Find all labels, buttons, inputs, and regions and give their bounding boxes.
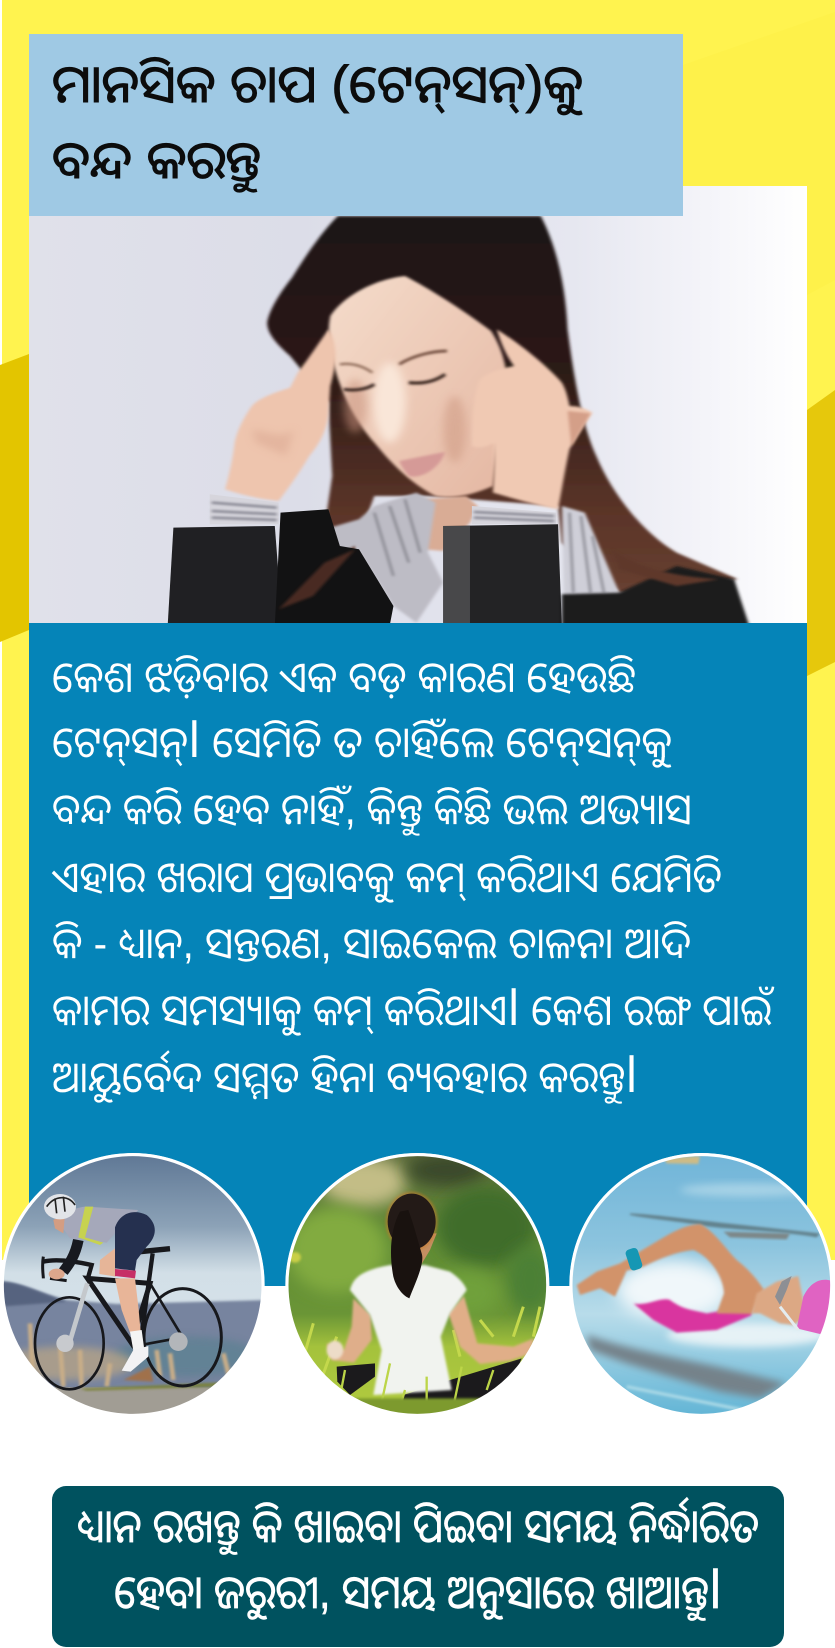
paragraph: କାମର ସମସ୍ୟାକୁ କମ୍ କରିଥାଏ। କେଶ ରଙ୍ଗ ପାଇଁ [52, 974, 775, 1037]
face [329, 276, 506, 497]
callout line 2: ହେବା ଜରୁରୀ, ସମୟ ଅନୁସାରେ ଖାଆନ୍ତୁ। [114, 1554, 722, 1621]
paragraph: ଟେନ୍‌ସନ୍। ସେମିତି ତ ଚାହିଁଲେ ଟେନ୍‌ସନ୍‌କୁ [52, 706, 672, 769]
neck [424, 496, 478, 551]
rider [99, 1248, 116, 1277]
eyes, brows and lips [340, 351, 447, 390]
arm [577, 1224, 764, 1314]
striped cuffs [210, 494, 279, 524]
paragraph: କେଶ ଝଡ଼ିବାର ଏକ ବଡ଼ କାରଣ ହେଉଛି [52, 654, 636, 702]
swimsuit [633, 1299, 751, 1333]
callout: bottom note [52, 1486, 784, 1647]
seated figure [337, 1363, 375, 1395]
paragraph: ବନ୍ଦ କରି ହେବ ନାହିଁ, କିନ୍ତୁ କିଛି ଭଲ ଅଭ୍ୟାସ [52, 785, 692, 836]
circle photo: cyclist [0, 1150, 267, 1423]
photo: woman with headache [29, 186, 807, 626]
paragraph: ଏହାର ଖରାପ ପ୍ରଭାବକୁ କମ୍ କରିଥାଏ ଯେମିତି [51, 854, 722, 903]
black jacket [168, 526, 282, 626]
blue text panel [29, 623, 807, 1286]
shirt [334, 491, 443, 622]
wristband [626, 1248, 642, 1270]
title banner [29, 34, 683, 216]
paragraph: ଆୟୁର୍ବେଦ ସମ୍ମତ ହିନା ବ୍ୟବହାର କରନ୍ତୁ। [52, 1041, 638, 1104]
callout line 1: ଧ୍ୟାନ ରଖନ୍ତୁ କି ଖାଇବା ପିଇବା ସମୟ ନିର୍ଦ୍ଧାରିତ [77, 1497, 759, 1555]
right hand [472, 329, 592, 509]
circle photo: meditation [280, 1150, 560, 1423]
paragraph [51, 654, 775, 1104]
head, cap and goggles [752, 1276, 807, 1325]
paragraph: କି - ଧ୍ୟାନ, ସନ୍ତରଣ, ସାଇକେଲ ଚାଳନା ଆଦି [52, 920, 691, 968]
title line 1: ମାନସିକ ଚାପ (ଟେନ୍‌ସନ୍)କୁ [52, 56, 583, 115]
bicycle [35, 1249, 221, 1389]
circle photo: swimmer [560, 1150, 835, 1423]
title line 2: ବନ୍ଦ କରନ୍ତୁ [52, 132, 261, 193]
hair [267, 216, 738, 606]
left hand [225, 329, 336, 501]
